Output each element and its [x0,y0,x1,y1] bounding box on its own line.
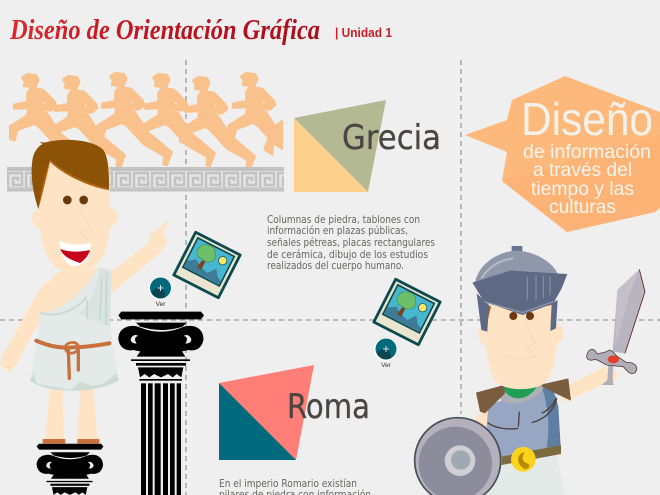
hair [32,140,109,209]
bubble text: a través del [533,159,632,181]
bubble text [523,141,651,218]
button: ver 1 [148,277,172,308]
left arm [0,280,47,372]
Roma title: Roma [287,387,370,427]
panel: Grecia heading [294,100,441,192]
Grecia text block: Columnas de piedra, tablones con [267,214,420,226]
greek character [0,140,169,495]
Roma text block [219,478,371,495]
Grecia text block: información en plazas públicas, [267,225,408,237]
Grecia shape [294,100,386,192]
greek key band [7,167,284,192]
roman soldier [415,246,660,495]
icon: picture 2 [374,279,440,345]
helmet knob [512,246,522,253]
armour [487,387,561,457]
bubble text: culturas [549,196,616,218]
nose [77,205,91,242]
shield arm [475,410,490,428]
Grecia text block [267,214,435,272]
column large [118,312,204,495]
column under character [37,444,103,495]
shield [415,418,501,495]
bubble heading: Diseño [521,93,653,145]
chest [42,267,100,313]
mouth [59,241,91,266]
icon: picture 1 [174,232,240,298]
right arm [108,219,169,293]
legs [45,387,97,440]
sword arm [558,367,617,403]
buckle [511,447,536,472]
sword [587,269,645,385]
nose and smile [505,322,536,359]
button: ver 2 [374,338,397,369]
ears [478,323,564,346]
title: Diseño de Orientación Gráfica [9,14,320,46]
skirt [487,455,565,495]
bubble text: tiempo y las [531,178,634,200]
Grecia text block: realizados del cuerpo humano. [267,260,404,272]
tunic fold [79,267,112,327]
tunic [30,267,119,391]
Grecia title: Grecia [342,118,441,158]
panel: Roma heading [219,365,370,460]
Grecia text block: señales pétreas, placas rectangulares [267,237,435,249]
bubble text: de información [523,141,651,163]
sandals [43,439,99,444]
belt [36,341,109,378]
collar [497,385,543,403]
eyes [509,312,534,320]
belt [502,445,561,465]
button: ver 1: Ver [156,301,166,308]
hair [485,302,553,321]
head [485,300,557,389]
Grecia text block: de cerámica, dibujo de los estudios [267,249,428,261]
button: ver 2: Ver [381,362,392,369]
subtitle: unit: | Unidad 1 [335,25,392,40]
Roma text block: En el imperio Romario existían [219,478,357,490]
Roma shape [219,365,314,460]
helmet [472,251,567,332]
speech bubble [465,76,660,232]
head [39,163,110,273]
runners frieze [9,73,302,169]
eyes [63,196,88,204]
shoulder pads [476,385,505,413]
ears [32,209,118,230]
